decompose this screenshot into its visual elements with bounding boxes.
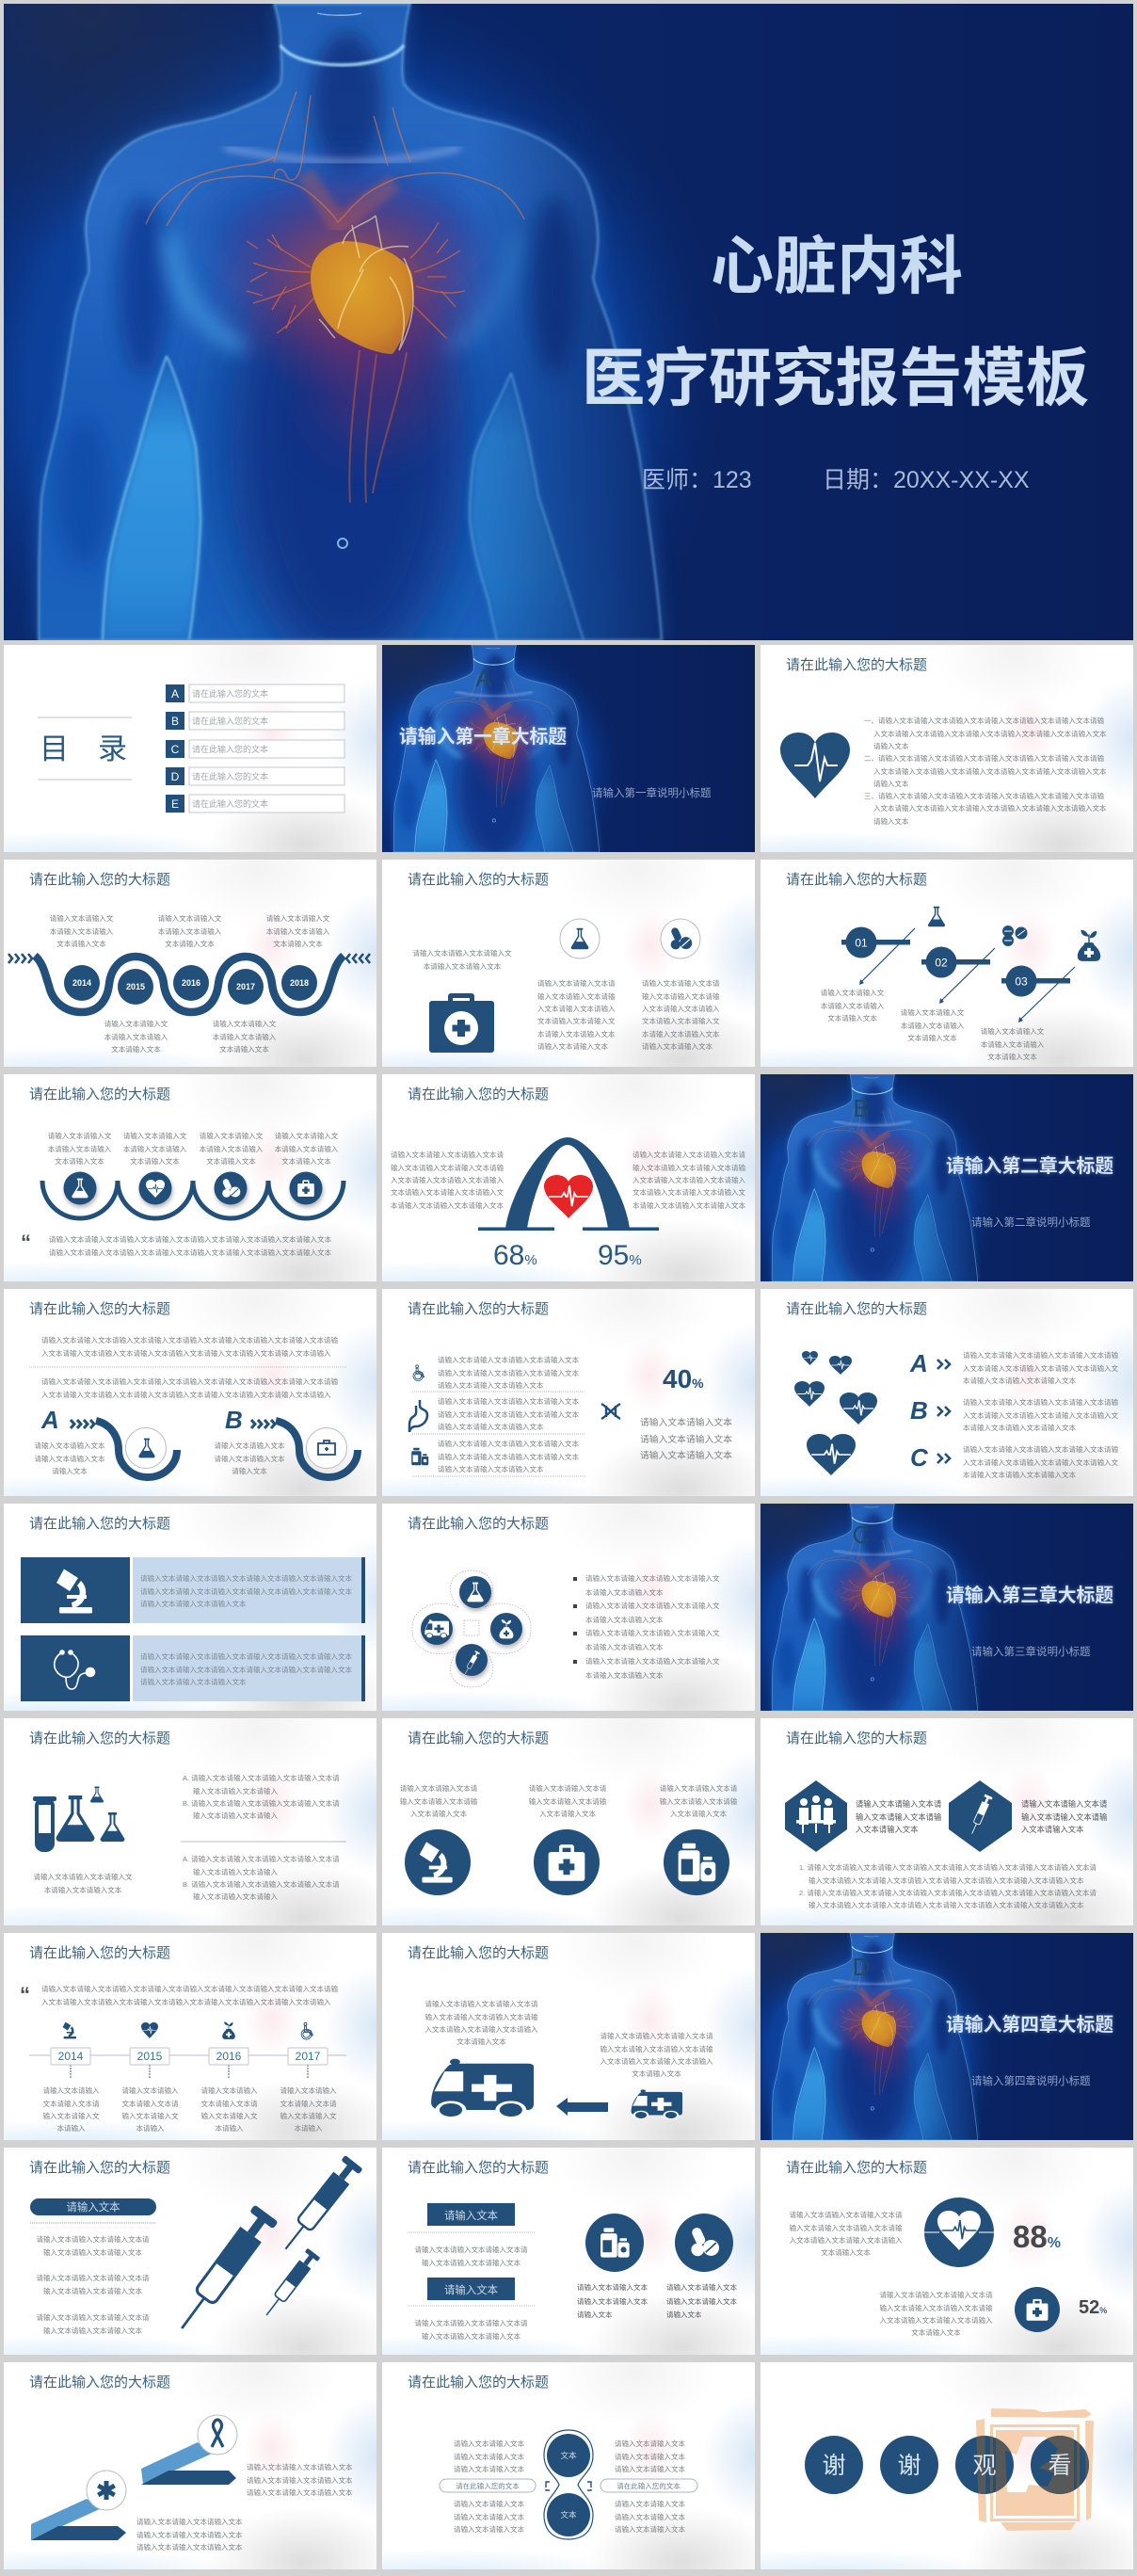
heading: 请在此输入您的大标题 [29,2160,170,2176]
label box one [427,2203,515,2226]
slide: percentages 88 and 52 [761,2148,1133,2355]
letter C: C [910,1443,928,1472]
hexagon text two: 请输入文本请输入文本请输入文本请输入文本请输入文本请输入文本 [1021,1799,1107,1834]
icon: pills circle [215,1171,247,1205]
arrow [556,2098,608,2116]
label box two [427,2278,515,2300]
row dividers [412,1392,585,1476]
icon: heart circle [924,2198,995,2267]
text two: 请输入文本请输入文本请输入文本请输入文本请输入文本请输入文本请输入文本请输入文本请输入文本请输入文本请输入文本 [879,2291,992,2337]
key 02 [921,947,995,1004]
chapter letter: B [853,1094,870,1122]
icon: microscope [63,2022,76,2038]
slide: table of contents [4,645,376,852]
right text: 请输入文本请输入文本请输入文本请输入文本请输入文本请输入文本请输入文本请输入文本请输入文本请输入文本请输入文本请输入文本请输入文本请输入文本请输入文本请输入文本 [633,1151,745,1210]
circle bottom [547,2493,590,2536]
slide: icon rows with 40 percent [382,1289,755,1496]
text bottom left: 请输入文本请输入文本请输入文本请输入文本请输入文本请输入文本 [454,2500,524,2534]
chapter title: 请输入第四章大标题 [946,2015,1113,2036]
icon: medkit circle [534,1829,600,1895]
quote text: 请输入文本请输入文本请输入文本请输入文本请输入文本请输入文本请输入文本请输入文本请输入文本请输入文本请输入文本请输入文本请输入文本请输入文本请输入文本请输入文本请输入 [41,1985,338,2006]
arrows [8,954,370,963]
heading: 请在此输入您的大标题 [29,1731,170,1747]
stat caption [640,1418,732,1461]
illustration: torso [382,645,755,862]
slide: hexagons with lists [761,1718,1133,1925]
text right: 请输入文本请输入文本请输入文本请输入文本请输入文本请输入文本请输入文本请输入文本请输入文本请输入文本请输入文本 [601,2032,713,2078]
heading: 请在此输入您的大标题 [29,1945,170,1961]
pill left [440,2479,536,2492]
year labels: 2014 [72,978,91,988]
icon: microscope circle [405,1829,471,1895]
label text two: 请输入文本 [444,2285,498,2296]
letter A: A [910,1349,928,1377]
icon: pills circle [675,2214,733,2272]
slide: arch with heart [382,1074,755,1281]
year labels: 2017 [236,982,255,991]
icon: medicine circle [490,1613,522,1645]
year box 2015: 2015 [137,2050,163,2063]
pill text: 请输入文本 [67,2202,120,2214]
column text 2017: 请输入文本请输入文本请输入文本请输入文本请输入文本请输入 [280,2086,337,2133]
text lower: 请输入文本请输入文本请输入文本 [136,2543,243,2552]
heading: 请在此输入您的大标题 [408,2375,549,2391]
slide: thank you [761,2362,1133,2569]
contents items: 请在此输入您的文本 [192,771,268,781]
stat 95 percent: 95% [598,1240,642,1271]
stat caption: 请输入文本请输入文本 [640,1451,732,1461]
year labels [72,978,309,991]
list top: B. 请输入文本请输入文本请输入文本请输入文本请输入文本请输入文本请输入 [183,1799,340,1820]
icon: medkit circle [290,1171,322,1205]
icon: wheelchair [301,2022,312,2039]
slide: ambulances [382,1933,755,2140]
icon: ambulance circle [421,1613,453,1645]
slide: labels with bottle and pills [382,2148,755,2355]
caption A: 请输入文本请输入文本请输入文本请输入文本请输入文本 [34,1441,105,1475]
heading: 请在此输入您的大标题 [408,1301,549,1317]
bullet text two: 请输入文本请输入文本请输入文本请输入文本请输入文本请输入文本 [585,1602,719,1624]
heading: 请在此输入您的大标题 [408,1087,549,1103]
slide: medical kit columns [382,860,755,1067]
numbered list: 1. 请输入文本请输入文本请输入文本请输入文本请输入文本请输入文本请输入文本请输入文本请输入文本请输入文本请输入文本请输入文本请输入文本请输入文本请输入文本请输入文本 [799,1863,1097,1885]
icon: star of life [98,2481,115,2500]
icon: top syringe [277,2155,363,2256]
icon caption: 请输入文本请输入文本请输入文本请输入文本请输入文本 [34,1873,132,1894]
caption B: 请输入文本请输入文本请输入文本请输入文本请输入文本 [215,1441,284,1475]
year circles [64,965,317,1005]
chapter title: 请输入第二章大标题 [946,1156,1113,1177]
contents items: D [171,770,180,783]
numbered list: 一、请输入文本请输入文本请输入文本请输入文本请输入文本请输入文本请输入文本请输入文本请输入文本请输入文本请输入文本请输入文本请输入文本请输入文本 [864,716,1107,750]
slide: syringes [4,2148,376,2355]
chapter subtitle: 请输入第三章说明小标题 [971,1647,1090,1658]
key 03 [1001,966,1075,1022]
icon: heart circle [139,1171,171,1205]
heading: 请在此输入您的大标题 [786,657,927,673]
text top right: 请输入文本请输入文本请输入文本请输入文本请输入文本请输入文本 [615,2439,685,2473]
text one: 请输入文本请输入文本请输入文本请输入文本请输入文本请输入文本 [414,2246,527,2267]
year box 2014: 2014 [58,2050,84,2063]
heading: 请在此输入您的大标题 [408,1945,549,1961]
key 02: 02 [935,957,948,970]
caption three: 请输入文本请输入文本请输入文本请输入文本请输入文本请输入文本 [660,1784,737,1818]
hexagon text one: 请输入文本请输入文本请输入文本请输入文本请输入文本请输入文本 [856,1799,941,1834]
heading: 请在此输入您的大标题 [29,1087,170,1103]
bullet text four: 请输入文本请输入文本请输入文本请输入文本请输入文本请输入文本 [585,1657,719,1680]
list bottom: A. 请输入文本请输入文本请输入文本请输入文本请输入文本请输入文本请输入 [183,1855,340,1876]
key 01 [841,926,915,985]
year labels: 2016 [182,978,200,988]
contents items: E [171,797,179,811]
curve A [71,1420,177,1477]
contents items: 请在此输入您的文本 [192,716,268,726]
numbered list: 二、请输入文本请输入文本请输入文本请输入文本请输入文本请输入文本请输入文本请输入文本请输入文本请输入文本请输入文本请输入文本请输入文本请输入文本 [864,754,1107,788]
row text two: 请输入文本请输入文本请输入文本请输入文本请输入文本请输入文本请输入文本请输入文本请输入文本请输入文本请输入文本 [438,1397,579,1431]
caption three: 请输入文本请输入文本请输入文本请输入文本请输入文本 [200,1132,263,1166]
stat caption: 请输入文本请输入文本 [640,1418,732,1428]
step lower [31,2471,126,2540]
illustration: torso [761,1504,1133,1721]
letter B: B [910,1396,928,1425]
contents items: A [171,687,179,700]
contents rules [38,717,132,780]
chapter title: 请输入第一章大标题 [399,727,567,748]
contents items: 请在此输入您的文本 [192,744,268,754]
wave band [35,956,344,1012]
list top: A. 请输入文本请输入文本请输入文本请输入文本请输入文本请输入文本请输入 [183,1774,340,1795]
heading: 请在此输入您的大标题 [29,2375,170,2391]
heading: 请在此输入您的大标题 [29,1516,170,1532]
step upper [141,2415,237,2485]
band one [21,1557,365,1623]
chapter subtitle: 请输入第四章说明小标题 [971,2076,1090,2087]
band text one: 请输入文本请输入文本请输入文本请输入文本请输入文本请输入文本请输入文本请输入文本请输入文本请输入文本请输入文本请输入文本请输入文本请输入文本请输入文本 [140,1574,352,1608]
column text one: 请输入文本请输入文本请输入文本请输入文本请输入文本 [577,2283,648,2319]
key 03: 03 [1015,975,1028,989]
column text two: 请输入文本请输入文本请输入文本请输入文本请输入文本 [666,2283,737,2319]
center brackets [546,2482,591,2490]
icon: red heart [544,1175,593,1218]
connector ticks [71,2065,308,2078]
text upper: 请输入文本请输入文本请输入文本 [247,2476,352,2485]
stat 40 percent: 40% [663,1364,704,1393]
date label: 日期：20XX-XX-XX [823,467,1030,493]
text block two: 请输入文本请输入文本请输入文本请输入文本请输入文本请输入文本请输入文本请输入文本请输入文本请输入文本请输入文本请输入文本请输入文本请输入文本请输入文本请输入文本请输入 [41,1377,338,1399]
year box 2016: 2016 [216,2050,242,2063]
list top [183,1774,340,1820]
icon: medkit [429,993,494,1053]
letter B: B [225,1406,243,1434]
chevrons [937,1360,950,1463]
caption two: 请输入文本请输入文本请输入文本请输入文本请输入文本请输入文本 [529,1784,606,1818]
column text 2015: 请输入文本请输入文本请输入文本请输入文本请输入文本请输入 [122,2086,179,2133]
icon: plant medicine [222,2022,235,2039]
icon: bottles circle [585,2214,644,2272]
quote text: 请输入文本请输入文本请输入文本请输入文本请输入文本请输入文本请输入文本请输入文本请输入文本请输入文本请输入文本请输入文本请输入文本请输入文本请输入文本请输入文本 [49,1235,331,1257]
slide: clover of icons with bullets [382,1504,755,1711]
thank-you characters [822,2453,1072,2479]
row text three: 请输入文本请输入文本请输入文本请输入文本请输入文本请输入文本请输入文本请输入文本请输入文本请输入文本请输入文本 [438,1440,579,1473]
caption 2014: 请输入文本请输入文本请输入文本请输入文本请输入文本 [50,914,113,948]
doctor label: 医师：123 [642,467,752,493]
bullet text three: 请输入文本请输入文本请输入文本请输入文本请输入文本请输入文本 [585,1629,719,1651]
contents items: B [171,715,179,728]
hourglass outline [544,2430,593,2539]
slide: microscope and stethoscope bands [4,1504,376,1711]
text lower: 请输入文本请输入文本请输入文本 [136,2531,243,2539]
text 02: 请输入文本请输入文本请输入文本请输入文本请输入文本 [901,1008,964,1042]
text block one: 请输入文本请输入文本请输入文本请输入文本请输入文本请输入文本请输入文本请输入文本请输入文本请输入文本请输入文本请输入文本请输入文本请输入文本请输入文本请输入文本请输入 [41,1336,338,1358]
bullet text one: 请输入文本请输入文本请输入文本请输入文本请输入文本请输入文本 [585,1574,719,1597]
circle top [547,2434,590,2477]
arcs [42,1181,344,1218]
contents heading: 目录 [40,733,156,765]
pill left: 请在此输入您的文本 [456,2481,520,2490]
icon: pills circle [661,919,700,958]
slide: hearts and ABC [761,1289,1133,1496]
heading: 请在此输入您的大标题 [408,1731,549,1747]
text top: 请输入文本请输入文本请输入文本请输入文本请输入文本请输入文本请输入文本请输入文本请输入文本请输入文本请输入文本 [425,2000,538,2046]
caption two: 请输入文本请输入文本请输入文本请输入文本请输入文本 [123,1132,186,1166]
icon: bottle [411,1448,428,1465]
icon: hearts [794,1351,877,1475]
heading: 请在此输入您的大标题 [408,872,549,888]
caption 2016: 请输入文本请输入文本请输入文本请输入文本请输入文本 [158,914,221,948]
icon: syringe circle [456,1644,488,1676]
bullets [573,1577,577,1664]
band text two: 请输入文本请输入文本请输入文本请输入文本请输入文本请输入文本请输入文本请输入文本请输入文本请输入文本请输入文本请输入文本请输入文本请输入文本请输入文本 [140,1652,352,1686]
text A: 请输入文本请输入文本请输入文本请输入文本请输入文本请输入文本请输入文本请输入文本请输入文本请输入文本请输入文本请输入文本 [963,1351,1118,1385]
timeline axis [29,2054,346,2056]
thank-you characters: 谢 [822,2453,846,2479]
icon: wheelchair [413,1365,424,1380]
cover title line 1: 心脏内科 [711,232,963,302]
icon: heart [780,733,850,798]
dashed clover outline [412,1570,531,1687]
slide: chapter three divider [761,1504,1133,1711]
text two: 请输入文本请输入文本请输入文本请输入文本请输入文本请输入文本 [36,2274,149,2295]
numbered list [864,716,1107,826]
icon: flask circle [560,919,600,958]
icon: small ambulance [632,2089,682,2119]
text 03: 请输入文本请输入文本请输入文本请输入文本请输入文本 [981,1027,1044,1061]
icon: large syringe [170,2205,279,2337]
heading: 请在此输入您的大标题 [786,872,927,888]
chapter title: 请输入第三章大标题 [946,1586,1113,1606]
caption four: 请输入文本请输入文本请输入文本请输入文本请输入文本 [275,1132,338,1166]
key 01: 01 [855,936,868,949]
icon: flask circle [64,1171,96,1205]
year labels: 2015 [126,982,145,991]
stat caption: 请输入文本请输入文本 [640,1435,732,1445]
contents items: 请在此输入您的文本 [192,798,268,809]
icon: bottles circle [664,1829,729,1895]
numbered list: 2. 请输入文本请输入文本请输入文本请输入文本请输入文本请输入文本请输入文本请输入文本请输入文本请输入文本请输入文本请输入文本请输入文本请输入文本请输入文本请输入文本 [799,1889,1097,1909]
circle bottom: 文本 [560,2510,577,2520]
slide: timeline wave [4,860,376,1067]
text lower [136,2518,243,2552]
divider [29,1366,346,1368]
text bottom right: 请输入文本请输入文本请输入文本请输入文本请输入文本请输入文本 [615,2500,685,2534]
heading: 请在此输入您的大标题 [29,872,170,888]
year box 2017 [288,2048,328,2065]
list bottom: B. 请输入文本请输入文本请输入文本请输入文本请输入文本请输入文本请输入 [183,1880,340,1901]
text two: 请输入文本请输入文本请输入文本请输入文本请输入文本请输入文本 [414,2319,527,2341]
icon: stomach [409,1400,427,1432]
slide: chapter one divider [382,645,755,852]
label text one: 请输入文本 [444,2211,498,2222]
divider [30,2222,156,2224]
icon: medkit circle [1015,2287,1060,2332]
illustration: torso [761,1933,1133,2150]
text one: 请输入文本请输入文本请输入文本请输入文本请输入文本请输入文本请输入文本请输入文本请输入文本请输入文本请输入文本 [789,2211,902,2257]
stamp [976,2408,1094,2531]
caption one: 请输入文本请输入文本请输入文本请输入文本请输入文本 [48,1132,111,1166]
chapter subtitle: 请输入第二章说明小标题 [971,1217,1090,1229]
stat 52 percent: 52% [1079,2297,1107,2318]
hero cover slide [4,4,1133,640]
stat 68 percent: 68% [493,1240,537,1271]
dividers [408,2232,536,2306]
hexagon: syringe [949,1780,1012,1852]
year labels: 2018 [290,978,309,988]
column text two: 请输入文本请输入文本请输入文本请输入文本请输入文本请输入文本请输入文本请输入文本请输入文本请输入文本请输入文本请输入文本请输入文本 [642,979,719,1051]
caption 2017: 请输入文本请输入文本请输入文本请输入文本请输入文本 [213,1020,276,1054]
chapter letter: C [853,1521,870,1549]
heading: 请在此输入您的大标题 [786,2160,927,2176]
contents items [166,684,344,813]
slide: hourglass diagram [382,2362,755,2569]
contents items: C [171,743,180,756]
arch [478,1137,659,1231]
quote mark: “ [21,1231,31,1254]
icon: ribbon [212,2420,223,2447]
thank-you circles [805,2436,1089,2494]
year box 2016 [209,2048,248,2065]
illustration: glowing human torso with heart [4,4,1133,672]
text C: 请输入文本请输入文本请输入文本请输入文本请输入文本请输入文本请输入文本请输入文本请输入文本请输入文本请输入文本请输入文本 [963,1445,1118,1479]
icon: dna [601,1404,620,1419]
text top left: 请输入文本请输入文本请输入文本请输入文本请输入文本请输入文本 [454,2439,524,2473]
curve B [251,1420,358,1477]
contents items: 请在此输入您的文本 [192,688,268,699]
slide: stepped ribbons [4,2362,376,2569]
stamp overlap [977,2436,1089,2494]
icon: plant medicine [1078,930,1100,961]
column text 2014: 请输入文本请输入文本请输入文本请输入文本请输入文本请输入 [43,2086,100,2133]
band two [21,1635,365,1701]
heading: 请在此输入您的大标题 [29,1301,170,1317]
icon: stethoscope [55,1650,94,1689]
icon: flask circle [459,1576,491,1608]
icon: small syringe [260,2248,320,2320]
hexagon: team [785,1780,847,1852]
thank-you characters: 观 [972,2453,997,2479]
caption one: 请输入文本请输入文本请输入文本请输入文本请输入文本请输入文本 [400,1784,477,1818]
text 01: 请输入文本请输入文本请输入文本请输入文本请输入文本 [821,989,884,1022]
letter A: A [41,1406,59,1434]
year box 2015 [130,2048,169,2065]
slide: four arcs [4,1074,376,1281]
heading: 请在此输入您的大标题 [786,1301,927,1317]
chapter letter: D [853,1953,870,1981]
year box 2017: 2017 [296,2050,321,2063]
illustration: torso [761,1074,1133,1292]
text one: 请输入文本请输入文本请输入文本请输入文本请输入文本请输入文本 [36,2235,149,2257]
thank-you characters: 看 [1048,2453,1072,2479]
icon: large ambulance [431,2059,534,2119]
text lower: 请输入文本请输入文本请输入文本 [136,2518,243,2526]
chapter letter: A [475,664,492,692]
list bottom [183,1855,340,1901]
slide: lab flasks with lists [4,1718,376,1925]
quote mark: “ [20,1983,30,2006]
numbered list: 三、请输入文本请输入文本请输入文本请输入文本请输入文本请输入文本请输入文本请输入文本请输入文本请输入文本请输入文本请输入文本请输入文本请输入文本 [864,792,1107,826]
row text one: 请输入文本请输入文本请输入文本请输入文本请输入文本请输入文本请输入文本请输入文本请输入文本请输入文本请输入文本 [438,1356,579,1390]
numbered list [799,1863,1097,1909]
slide: A and B curves [4,1289,376,1496]
heading: 请在此输入您的大标题 [408,1516,549,1532]
year box 2014 [51,2048,90,2065]
caption 2018: 请输入文本请输入文本请输入文本请输入文本请输入文本 [266,914,329,948]
slide: heart with numbered list [761,645,1133,852]
pill right: 请在此输入您的文本 [617,2481,681,2490]
text upper [247,2463,352,2497]
thank-you characters: 谢 [897,2453,921,2479]
heading: 请在此输入您的大标题 [408,2160,549,2176]
cover title line 2: 医疗研究报告模板 [582,344,1089,414]
divider [181,1841,346,1843]
slide: chapter four divider [761,1933,1133,2140]
caption 2015: 请输入文本请输入文本请输入文本请输入文本请输入文本 [104,1020,168,1054]
stat 88 percent: 88% [1013,2219,1061,2254]
icon: lab glassware [33,1787,124,1852]
slide: chapter two divider [761,1074,1133,1281]
text upper: 请输入文本请输入文本请输入文本 [247,2463,352,2471]
intro text: 请输入文本请输入文本请输入文本请输入文本请输入文本 [412,949,512,971]
text B: 请输入文本请输入文本请输入文本请输入文本请输入文本请输入文本请输入文本请输入文本请输入文本请输入文本请输入文本请输入文本 [963,1398,1118,1432]
slide: three icon circles [382,1718,755,1925]
column text 2016: 请输入文本请输入文本请输入文本请输入文本请输入文本请输入 [201,2086,258,2133]
left text: 请输入文本请输入文本请输入文本请输入文本请输入文本请输入文本请输入文本请输入文本请输入文本请输入文本请输入文本请输入文本请输入文本请输入文本请输入文本请输入文本 [391,1151,504,1210]
chapter subtitle: 请输入第一章说明小标题 [592,788,712,799]
circle top: 文本 [560,2451,577,2460]
slide: year timeline [4,1933,376,2140]
icon: flask [928,907,945,926]
heading: 请在此输入您的大标题 [786,1731,927,1747]
slide: numbered keys [761,860,1133,1067]
pill right [601,2479,697,2492]
column text one: 请输入文本请输入文本请输入文本请输入文本请输入文本请输入文本请输入文本请输入文本请输入文本请输入文本请输入文本请输入文本请输入文本 [537,979,616,1051]
text upper: 请输入文本请输入文本请输入文本 [247,2488,352,2497]
text three: 请输入文本请输入文本请输入文本请输入文本请输入文本请输入文本 [36,2313,149,2335]
icon: three tablets [1002,926,1028,946]
icon: heart [141,2022,158,2038]
label pill [30,2198,156,2215]
